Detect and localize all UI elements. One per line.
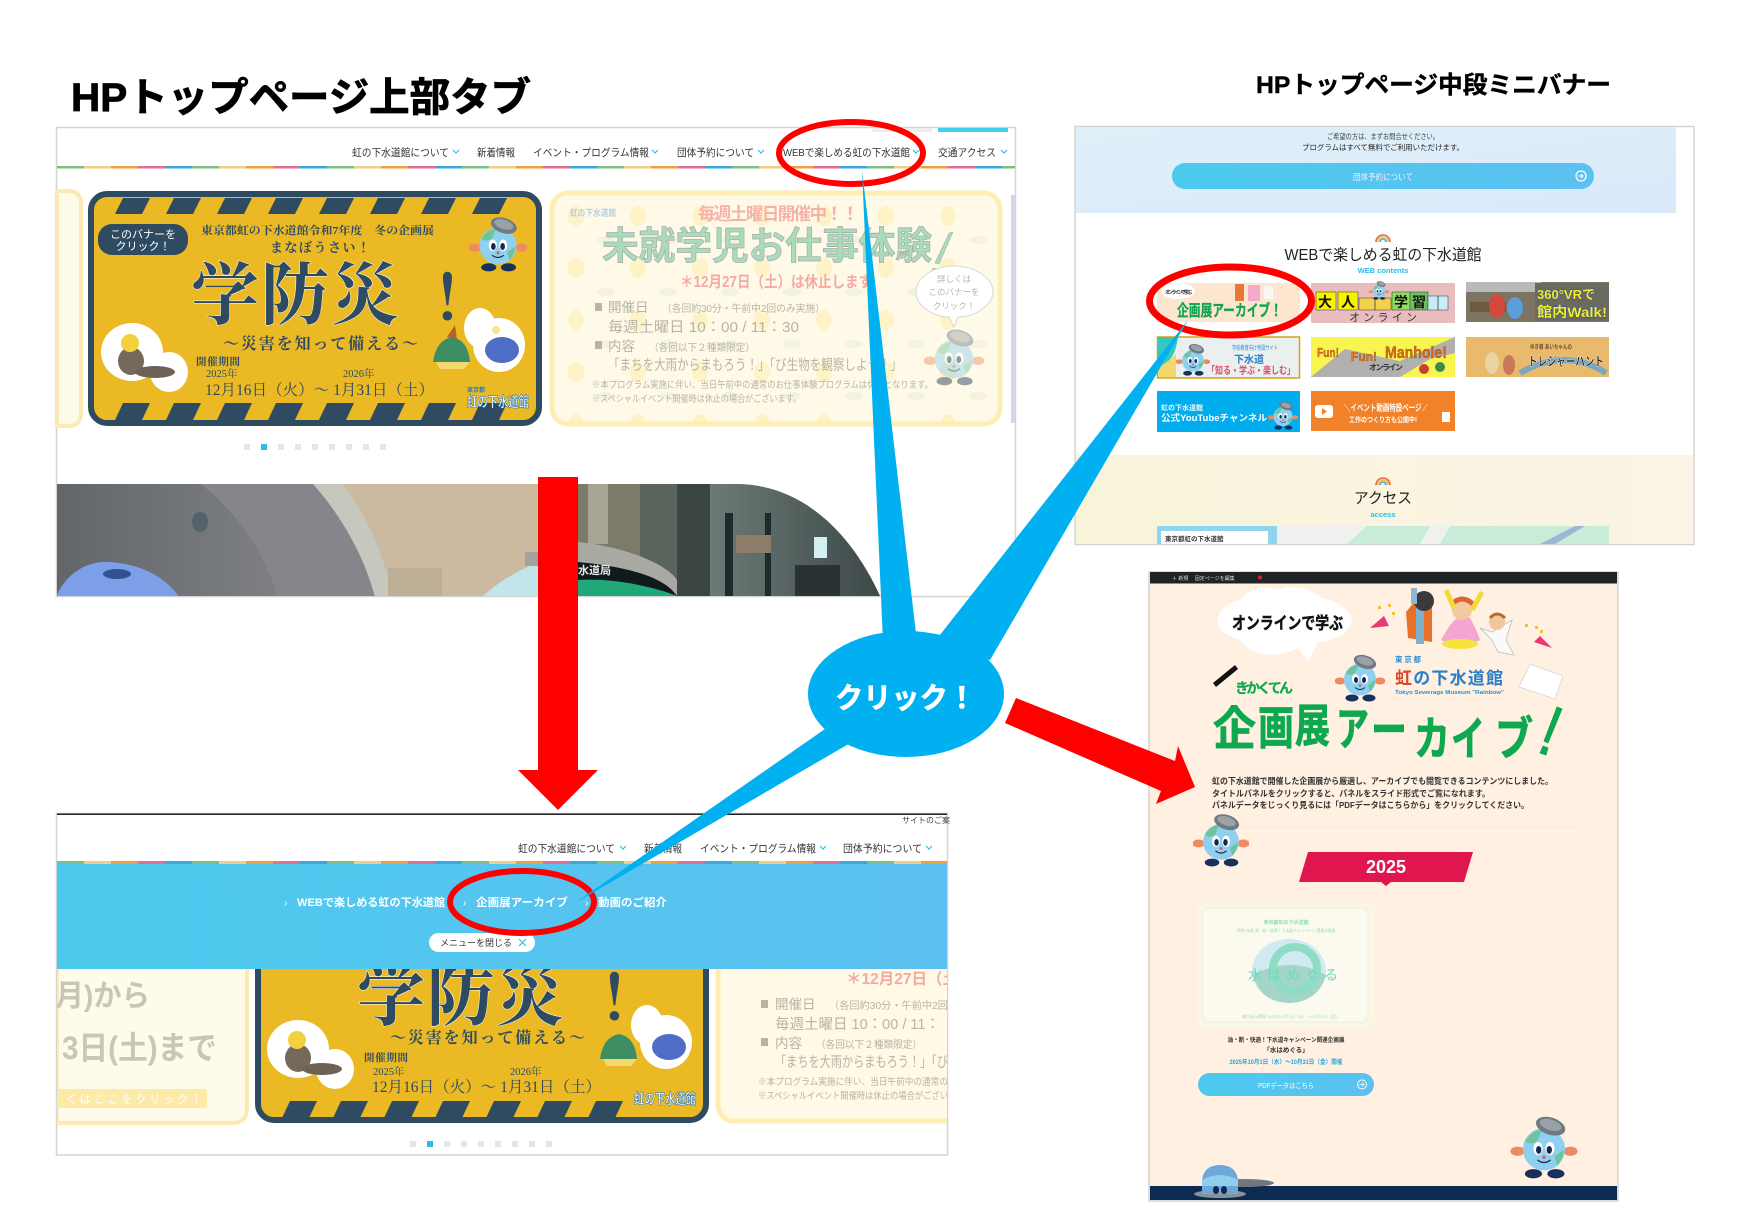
ellipse: archive banner highlight — [1150, 267, 1312, 335]
banner: preschool work experience: 毎週土曜日開催中！！ — [698, 204, 859, 224]
heading: mini banners: HPトップページ中段ミニバナー — [1256, 72, 1611, 99]
blue dropdown: 企画展アーカイブ — [476, 895, 568, 909]
banner: preschool work experience: 内容 — [608, 338, 636, 354]
blue dropdown: › — [463, 897, 467, 909]
navigation menu: 虹の下水道館について — [518, 842, 615, 855]
banner: disaster prevention: 開催期間 — [196, 355, 240, 368]
disaster prevention banner — [255, 969, 709, 1123]
banner: disaster prevention — [91, 194, 539, 423]
mini banner: youtube channel — [1157, 391, 1300, 432]
main title: archive: ア — [1336, 703, 1369, 755]
left sliver banner — [57, 191, 81, 426]
exhibition caption: 「水はめぐる」 — [1263, 1045, 1309, 1054]
speech bubble: クリック！ — [933, 301, 975, 311]
exhibition caption: 油・断・快適！下水道キャンペーン関連企画展 — [1228, 1036, 1344, 1044]
rainbow icon — [1376, 235, 1390, 242]
right pale banner: （各回約30分・午前中2回 — [829, 999, 948, 1012]
mini banner: archive: 企画展アーカイブ！ — [1177, 301, 1282, 320]
banner: preschool work experience: 「まちを大雨からまもろう！」「び生物を観察しよう！」 — [608, 357, 902, 374]
mini banner: treasure hunt — [1466, 337, 1609, 377]
mini banner: school: 「知る・学ぶ・楽しむ」 — [1207, 364, 1295, 377]
banner: disaster prevention: このバナーを — [110, 228, 176, 241]
banner: disaster prevention: 2026年 — [343, 367, 375, 380]
banner: disaster prevention: 東京都虹の下水道館令和7年度 冬の企画展 — [201, 223, 434, 237]
section heading: web contents: WEBで楽しめる虹の下水道館 — [1284, 246, 1482, 264]
panel: dropdown menu open: サイトのご案 — [902, 815, 950, 825]
callout: click — [575, 170, 1188, 903]
mascot with flask — [1510, 1113, 1578, 1178]
right pale banner — [716, 969, 947, 1124]
banner: disaster prevention: ～災害を知って備える～ — [223, 334, 418, 353]
blue dropdown: WEBで楽しめる虹の下水道館 — [297, 895, 445, 909]
access section: access — [1370, 510, 1396, 519]
arrow: red to archive page — [1005, 698, 1195, 804]
right pale banner: 内容 — [775, 1035, 802, 1051]
pagination dots — [244, 444, 386, 450]
group reservation section — [1076, 127, 1676, 213]
banner: disaster prevention: 2025年 — [206, 367, 238, 380]
navigation menu: イベント・プログラム情報 — [533, 146, 649, 159]
banner: preschool work experience: （各回約30分・午前中2回のみ実施） — [662, 302, 825, 315]
main title: archive: 企 — [1213, 703, 1256, 755]
exhibition card: 令和7年度 湯・新・快適！下水道キャンペーン 関連企画展 — [1237, 928, 1336, 933]
group reservation section: 団体予約について — [1353, 172, 1413, 182]
disaster prevention banner: 2026年 — [510, 1065, 542, 1078]
panel: homepage middle mini banners: WEB contents — [1358, 266, 1408, 275]
banner: preschool work experience — [552, 193, 1000, 424]
right pale banner: 毎週土曜日 10：00 / 11： — [775, 1016, 940, 1033]
year banner — [1299, 852, 1473, 886]
PDF button: PDFデータはこちら — [1258, 1081, 1314, 1090]
cloud bubble — [1217, 587, 1352, 662]
mini banner: treasure hunt: ゆき君 あいちゃんの — [1530, 343, 1572, 351]
panel: homepage top tabs — [56, 128, 1016, 597]
photo: museum interior — [56, 484, 887, 597]
banner: preschool work experience: 未就学児お仕事体験 — [602, 226, 932, 268]
intro text: タイトルパネルをクリックすると、パネルをスライド形式でご覧になれます。 — [1212, 788, 1490, 798]
ellipse: menu item highlight — [450, 871, 594, 933]
panel: exhibition archive page — [1149, 572, 1618, 1201]
group reservation section: ご希望の方は、まずお問合せください。 — [1327, 131, 1439, 141]
mini banner: adult learning — [1311, 280, 1455, 324]
museum logo: 虹の下水道館 — [1395, 669, 1503, 688]
disaster prevention banner: 開催期間 — [364, 1051, 408, 1064]
mini banner: 360 VR — [1466, 282, 1609, 322]
right sliver banner — [1011, 195, 1015, 423]
main title: archive: きかくてん — [1235, 680, 1293, 696]
speech bubble — [916, 266, 993, 327]
mini banner: adult learning: 学習 — [1394, 294, 1426, 310]
pagination dots — [410, 1141, 552, 1147]
right pale banner: ※スペシャルイベント開催時は休止の場合がござい — [758, 1090, 948, 1102]
mini banner: youtube channel: 公式YouTubeチャンネル — [1161, 412, 1267, 423]
main title: archive: ブ — [1495, 713, 1533, 765]
heading: top tab: HPトップページ上部タブ — [71, 76, 531, 120]
navigation menu: 団体予約について — [843, 842, 922, 855]
left pale banner — [57, 969, 249, 1125]
panel: homepage middle mini banners — [1075, 126, 1694, 544]
mini banner: adult learning: 大人 — [1318, 294, 1355, 310]
speech bubble: 詳しくは — [937, 274, 971, 284]
close menu pill: メニューを閉じる — [440, 938, 512, 948]
intro text: パネルデータをじっくり見るには「PDFデータはこちらから」をクリックしてください。 — [1212, 800, 1529, 810]
group reservation section: プログラムはすべて無料でご利用いただけます。 — [1302, 142, 1464, 152]
banner: disaster prevention: ！ — [432, 266, 494, 334]
footer bar — [1150, 1186, 1617, 1200]
small logo — [467, 386, 529, 410]
museum logo: Tokyo Sewerage Museum "Rainbow" — [1395, 690, 1505, 696]
mini banner: event videos: ＼イベント動画特設ページ／ — [1344, 402, 1428, 413]
navigation menu: 交通アクセス — [938, 147, 996, 159]
small logo: 東京都 — [467, 386, 485, 394]
blue dropdown: › — [585, 897, 589, 909]
banners beneath menu — [57, 969, 947, 1147]
banner: preschool work experience: ※スペシャルイベント開催時は休止の場合がございます。 — [592, 393, 801, 405]
access section — [1076, 455, 1693, 544]
right pale banner: （各回以下２種類限定） — [816, 1038, 922, 1051]
mascot in manhole — [1194, 1165, 1274, 1198]
cloud bubble: オンラインで学ぶ — [1232, 613, 1343, 633]
exhibition caption — [1228, 1036, 1344, 1066]
map — [1157, 526, 1609, 544]
right pale banner: ＊12月27日（土） — [846, 970, 973, 988]
navigation menu: イベント・プログラム情報 — [700, 842, 816, 855]
banner: preschool work experience: ※本プログラム実施に伴い、当日午前中の通常のお仕事体験プログラムは休止となります。 — [592, 379, 933, 391]
blue dropdown: › — [284, 897, 288, 909]
mini banner: 360 VR: 館内Walk! — [1537, 304, 1607, 320]
exhibition card — [1197, 902, 1374, 1028]
mini banner: youtube channel: 虹の下水道館 — [1161, 403, 1203, 412]
right pale banner: 「まちを大雨からまもろう！」「び — [775, 1054, 948, 1071]
disaster prevention banner: ～災害を知って備える～ — [390, 1028, 585, 1047]
panel: dropdown menu open — [46, 814, 973, 1155]
disaster prevention banner: ！ — [599, 966, 661, 1034]
access section: アクセス — [1354, 490, 1412, 507]
banner: preschool work experience: ＊12月27日（土）は休止します — [680, 273, 872, 291]
exhibition card: 館内展示期間 2025年10月1日（水）～10月31日（金） — [1242, 1013, 1340, 1019]
main title: archive — [1213, 680, 1562, 765]
banner: preschool work experience: 虹の下水道館 — [570, 207, 616, 218]
left pale banner: くはここをクリック！ — [66, 1093, 202, 1106]
mini banner: archive: オンラインで学ぶ — [1165, 289, 1192, 296]
mini banner: 360 VR: 360°VRで — [1537, 287, 1595, 302]
navigation menu: 虹の下水道館について — [352, 146, 449, 159]
fish and turtle — [433, 308, 525, 372]
banner: disaster prevention: まなぼうさい！ — [270, 240, 370, 255]
main title: archive: 展 — [1295, 700, 1330, 752]
intro text — [1212, 776, 1553, 810]
mini banner: school: 下水道 — [1234, 353, 1264, 366]
disaster prevention banner: 虹の下水道館 — [634, 1091, 696, 1107]
mini banner: manhole: Fun! — [1317, 345, 1339, 360]
banner: disaster prevention: 学防災 — [191, 258, 399, 334]
intro text: 虹の下水道館で開催した企画展から厳選し、アーカイブでも閲覧できるコンテンツにしました。 — [1212, 776, 1553, 786]
mascot reading — [1192, 811, 1250, 866]
speech bubble: このバナーを — [928, 287, 980, 297]
banner: preschool work experience: 毎週土曜日 10：00 / 11：30 — [608, 319, 799, 336]
navigation menu: 新着情報 — [477, 146, 515, 159]
close menu pill — [429, 933, 535, 952]
museum logo — [1395, 654, 1505, 696]
small logo: 虹の下水道館 — [467, 394, 529, 410]
banner: preschool work experience: 開催日 — [608, 300, 648, 315]
main title: archive: カ — [1414, 713, 1450, 765]
main title: archive: ー — [1371, 704, 1407, 756]
mini banner: treasure hunt: トレジャーハント — [1528, 354, 1604, 369]
navigation menu: 団体予約について — [677, 146, 754, 159]
mini banner: event videos: 工作のつくり方も公開中! — [1349, 415, 1417, 424]
navigation menu — [352, 146, 1007, 159]
year banner: 2025 — [1366, 857, 1406, 877]
mascot — [1334, 652, 1386, 702]
navigation menu: 新着情報 — [644, 842, 682, 855]
panel: exhibition archive page: ＋ 新規 固定ページを編集 — [1172, 575, 1235, 582]
navigation menu — [518, 842, 932, 855]
disaster prevention banner: 2025年 — [373, 1065, 405, 1078]
banner: disaster prevention: 12月16日（火）～ 1月31日（土） — [205, 381, 434, 399]
main title: archive: イ — [1451, 713, 1485, 765]
callout: click: クリック！ — [835, 683, 976, 715]
right pale banner: 開催日 — [775, 997, 816, 1012]
banner: disaster prevention: クリック！ — [116, 240, 170, 253]
map: 東京都虹の下水道館 — [1165, 534, 1224, 543]
mini banner: manhole: オンライン — [1369, 363, 1403, 372]
blue dropdown — [57, 864, 947, 969]
mini banner: manhole: Fun! — [1351, 349, 1377, 364]
otter badge — [101, 323, 188, 392]
right pale banner: ※本プログラム実施に伴い、当日午前中の通常の — [758, 1076, 948, 1088]
blue dropdown: 動画のご紹介 — [598, 895, 667, 909]
mini banner: manhole — [1311, 337, 1455, 377]
banner: preschool work experience: （各回以下２種類限定） — [649, 341, 755, 354]
mini banner: school — [1158, 337, 1300, 378]
mini banner: manhole: Manhole! — [1385, 343, 1447, 362]
left pale banner: 3日(土)まで — [62, 1030, 217, 1066]
characters — [1370, 588, 1552, 655]
ellipse: top tab highlight — [779, 122, 923, 184]
mini banner: adult learning: オンライン — [1349, 311, 1417, 324]
navigation menu: WEBで楽しめる虹の下水道館 — [783, 146, 910, 159]
mini banner: archive — [1157, 283, 1300, 322]
main title: archive: 画 — [1258, 702, 1294, 754]
exhibition card: 東京都虹の下水道館 — [1263, 919, 1309, 926]
museum logo: 東京都 — [1395, 654, 1422, 664]
disaster prevention banner: 学防災 — [357, 959, 564, 1035]
exhibition caption: 2025年10月1日（水）～10月31日（金）開催 — [1230, 1058, 1342, 1066]
mini banner: school: 学校教育向け特設サイト — [1232, 344, 1278, 352]
PDF button — [1198, 1073, 1374, 1096]
arrow: red down — [518, 477, 598, 810]
pencil and notepad — [1213, 664, 1563, 699]
photo: museum interior: 水道局 — [578, 563, 611, 577]
mini banner: event videos — [1311, 391, 1455, 431]
left pale banner: (月)から — [46, 980, 150, 1013]
disaster prevention banner: 12月16日（火）～ 1月31日（土） — [372, 1078, 601, 1096]
exhibition card: 水はめぐる — [1248, 967, 1338, 983]
